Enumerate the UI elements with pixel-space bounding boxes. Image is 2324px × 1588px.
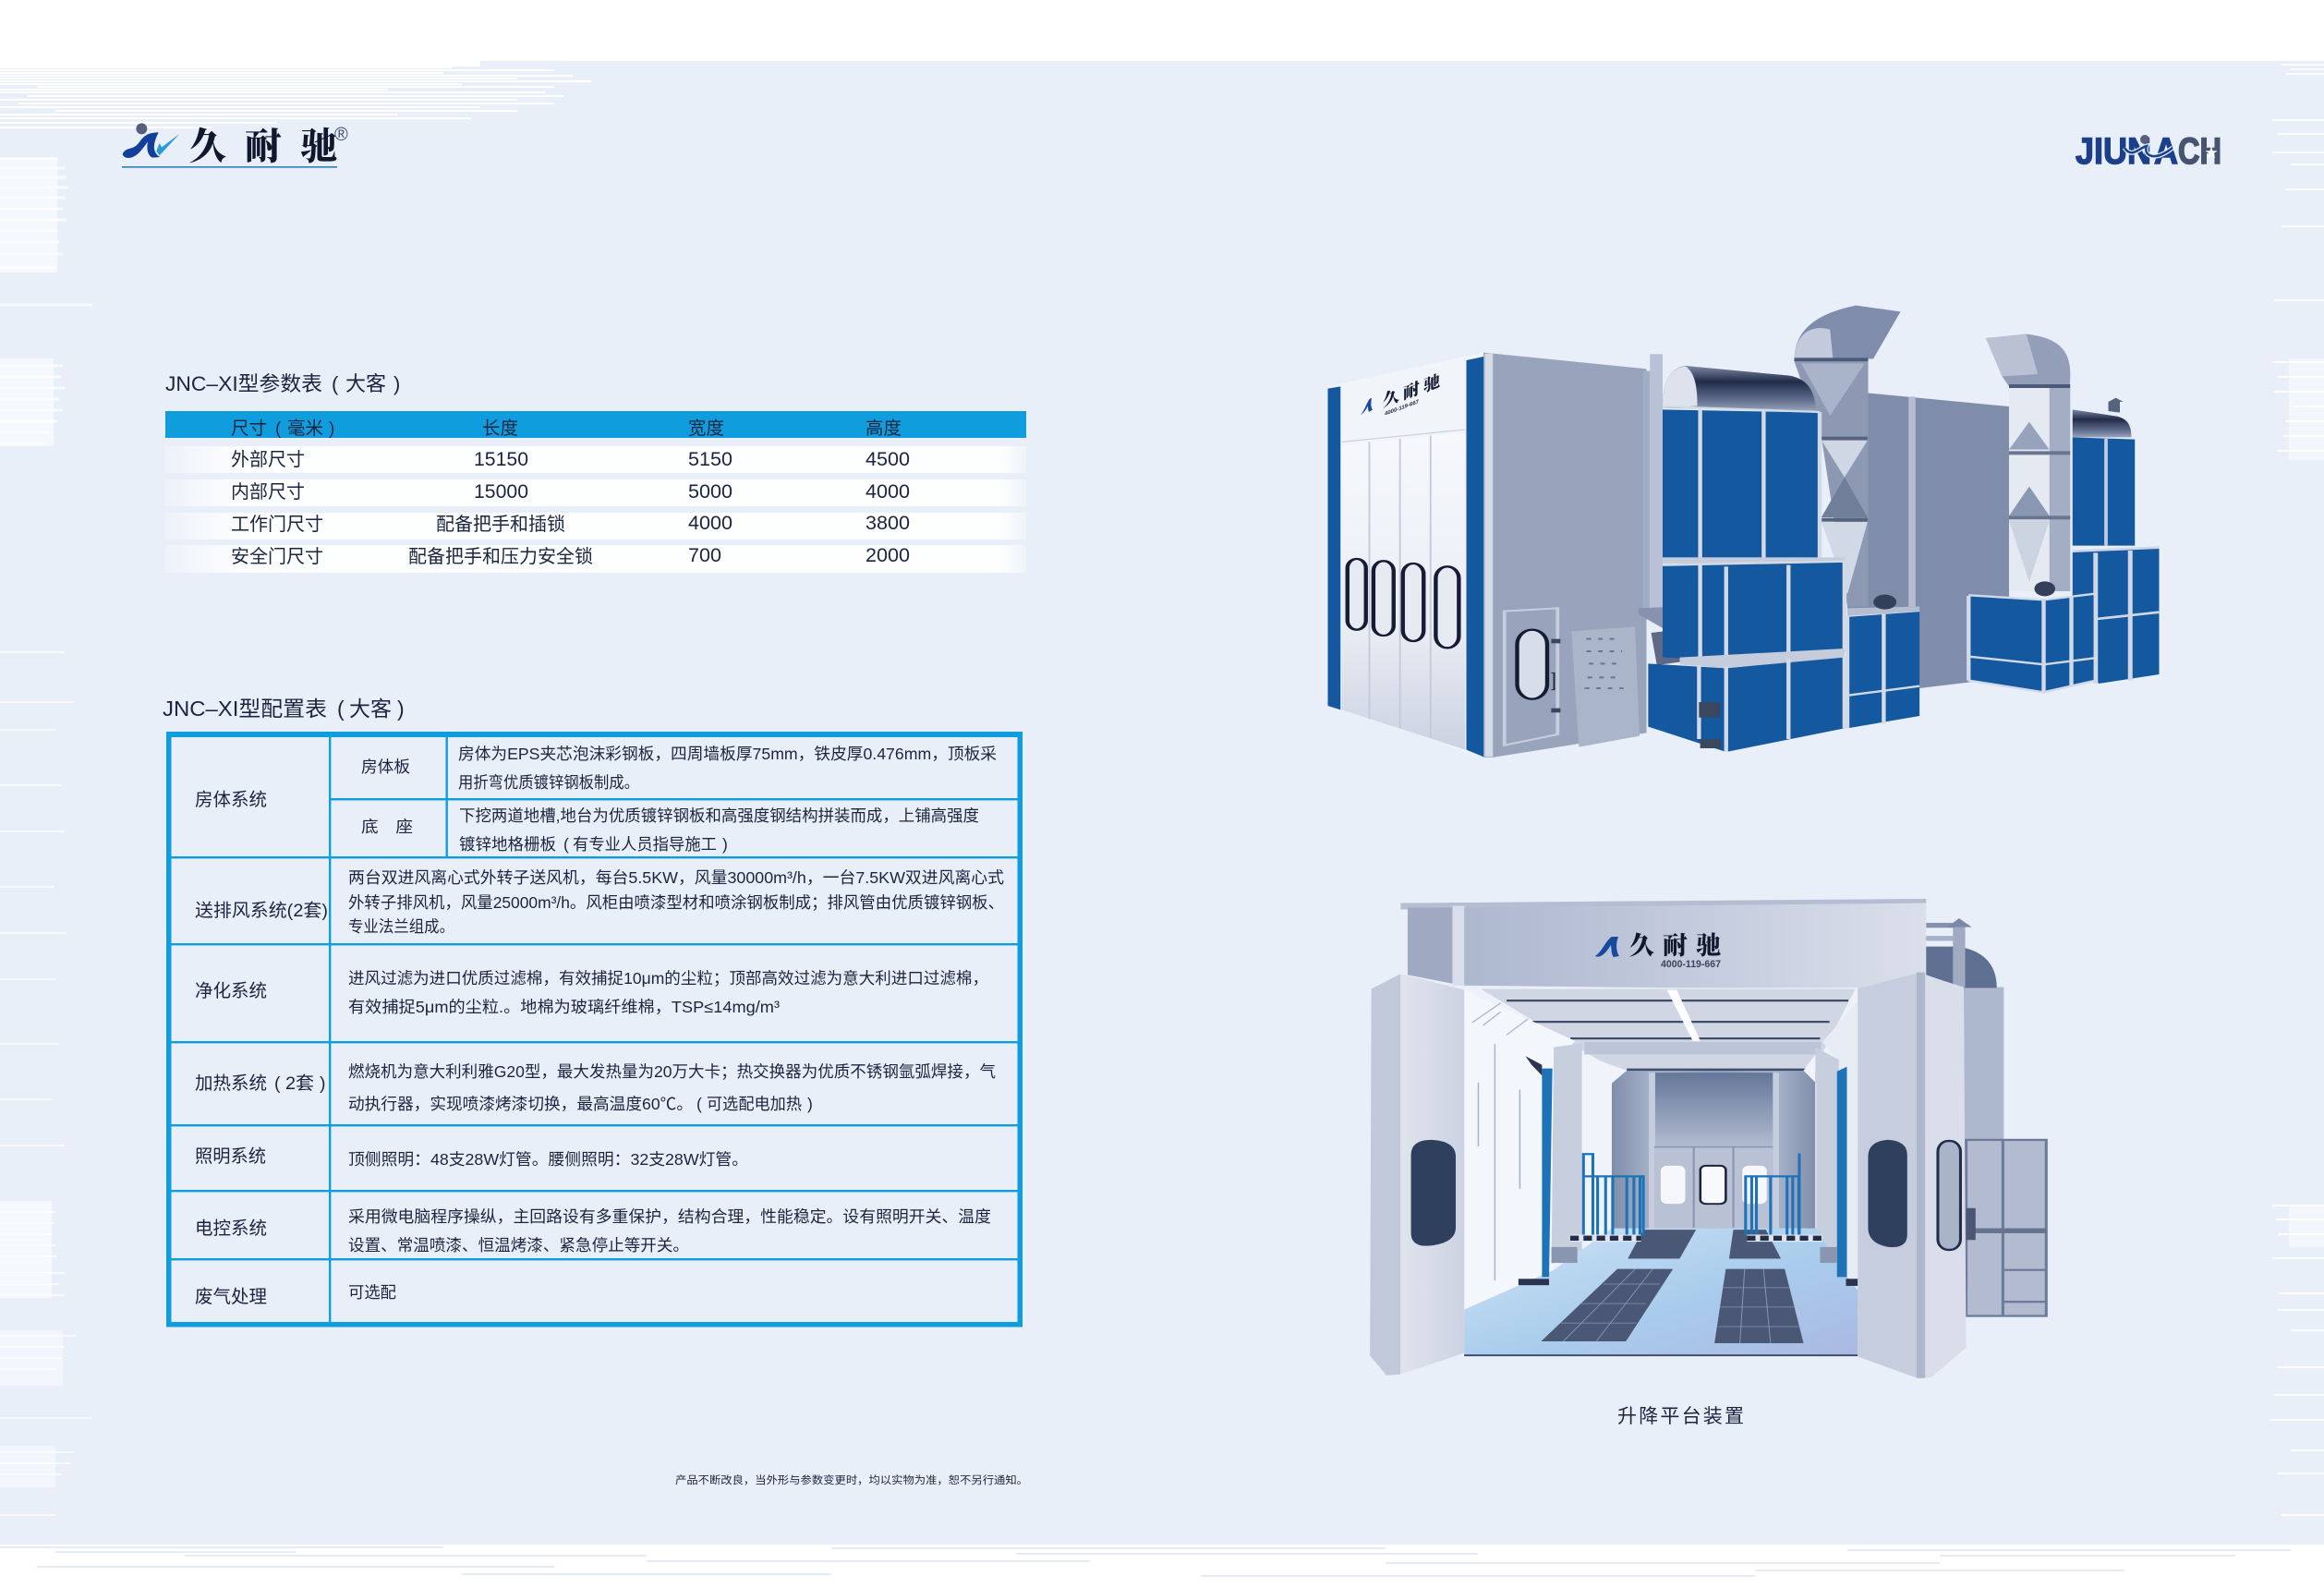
rear low cabinet xyxy=(2073,548,2160,684)
interior walls and ceiling xyxy=(1464,988,1858,1355)
icon: star: ★ xyxy=(2205,145,2218,160)
row: safety door: 配备把手和压力安全锁 xyxy=(408,546,593,567)
row: booth body: 底 座 xyxy=(361,818,413,836)
row: exhaust treatment: 可选配 xyxy=(348,1283,396,1302)
table header bar: 尺寸 xyxy=(231,418,267,439)
middle air cabinet xyxy=(1663,562,1845,661)
row: work door: 4000 xyxy=(688,513,732,534)
registered mark: ® xyxy=(334,125,348,145)
row: work door: 配备把手和插锁 xyxy=(436,514,565,535)
table header bar: 高度 xyxy=(865,418,902,439)
duct one xyxy=(1794,306,1901,607)
safety door xyxy=(1505,608,1560,746)
rear tall cabinet xyxy=(2073,398,2135,546)
row: purification: 有效捕捉5μm的尘粒.。地棉为玻璃纤维棉，TSP≤14mg/m³ xyxy=(348,998,780,1016)
row: heating: ) xyxy=(807,1095,813,1113)
heading: configuration table: JNC–XI型配置表 xyxy=(163,697,327,721)
row: booth body: 用折弯优质镀锌钢板制成。 xyxy=(458,773,639,792)
floor gratings xyxy=(1541,1230,1804,1343)
row: exterior: 15150 xyxy=(474,449,528,470)
row: booth body: 下挖两道地槽,地台为优质镀锌钢板和高强度钢结构拼装而成，上铺高强度 xyxy=(459,806,979,825)
row: booth body: 镀锌地格栅板 xyxy=(459,835,556,854)
row: exhaust treatment: 废气处理 xyxy=(195,1287,267,1307)
illustration: spray booth interior view xyxy=(1370,899,2046,1378)
row: lighting: 顶侧照明：48支28W灯管。腰侧照明：32支28W灯管。 xyxy=(348,1150,748,1169)
control panel xyxy=(1571,626,1640,747)
right door leaves xyxy=(1858,973,1967,1378)
caption: 升降平台装置 xyxy=(1617,1406,1744,1427)
row: booth body: 房体系统 xyxy=(195,790,267,810)
logo: JIUNACH wordmark: A xyxy=(2154,131,2178,172)
icon: swoosh mark xyxy=(123,123,179,158)
icon: swoosh over wordmark xyxy=(2124,135,2173,156)
front low cabinet xyxy=(1968,594,2096,692)
heading: configuration table: ( xyxy=(337,697,345,721)
row: lighting xyxy=(195,1146,748,1169)
row: air supply and exhaust: 两台双进风离心式外转子送风机，每台5.5KW，风量30000m³/h，一台7.5KW双进风离心式 xyxy=(348,868,1004,887)
back wall xyxy=(1612,1072,1816,1229)
table: dimensions xyxy=(165,411,1026,573)
row: safety door xyxy=(165,545,1026,573)
heading: parameter table: ) xyxy=(393,372,400,395)
row: exterior: 外部尺寸 xyxy=(231,449,305,470)
lower air cabinet xyxy=(1648,649,1845,752)
row: interior: 5000 xyxy=(688,481,732,503)
row: safety door: 安全门尺寸 xyxy=(231,546,323,567)
row: air supply and exhaust: 送排风系统(2套) xyxy=(195,901,328,921)
rear cabinet and stack xyxy=(1926,918,2046,1315)
logo: JIUNACH wordmark xyxy=(2076,131,2221,172)
row: safety door: 700 xyxy=(688,545,721,566)
left door leaf xyxy=(1370,974,1464,1376)
row: electric control: 采用微电脑程序操纵，主回路设有多重保护，结构合理，性能稳定。设有照明开关、温度 xyxy=(348,1207,991,1226)
top header xyxy=(1400,899,1926,990)
lifting platform right xyxy=(1746,1067,1858,1286)
row: air supply and exhaust: 外转子排风机，风量25000m³/h。风柜由喷漆型材和喷涂钢板制成；排风管由优质镀锌钢板、 xyxy=(348,893,1004,912)
row: heating: 动执行器，实现喷漆烤漆切换，最高温度60℃。 xyxy=(348,1095,693,1113)
footnote: 产品不断改良，当外形与参数变更时，均以实物为准，恕不另行通知。 xyxy=(675,1473,1028,1486)
row: heating: 加热系统 xyxy=(195,1073,267,1094)
row: booth body: ) xyxy=(722,835,728,854)
row: heating xyxy=(195,1062,996,1113)
row: air supply and exhaust xyxy=(195,868,1004,936)
row: interior: 内部尺寸 xyxy=(231,481,305,503)
heading: configuration table: ) xyxy=(397,697,405,721)
table header bar: ( xyxy=(275,419,282,439)
illustration: spray booth exterior xyxy=(1328,306,2160,758)
row: heating: ) xyxy=(320,1073,325,1094)
small cabinet xyxy=(1847,607,1919,728)
row: interior xyxy=(165,479,1026,506)
row: interior: 15000 xyxy=(474,481,528,503)
heading: parameter table: JNC–XI型参数表 xyxy=(165,372,322,395)
row: exterior: 4500 xyxy=(865,449,910,470)
heading: configuration table: 大客 xyxy=(349,697,392,721)
booth header logo: 久耐驰 xyxy=(1629,926,1721,962)
vent pipe xyxy=(1639,354,1681,665)
row: exhaust treatment xyxy=(195,1283,396,1307)
booth header logo xyxy=(1595,926,1721,970)
booth front logo xyxy=(1361,368,1440,426)
windows xyxy=(1348,559,1459,648)
logo: brand mark and name xyxy=(122,117,348,170)
row: work door: 3800 xyxy=(865,513,910,534)
rear wall xyxy=(1847,391,2009,688)
logo: JIUNACH wordmark: JIUN xyxy=(2076,131,2151,172)
logo: JIUNACH wordmark: CH xyxy=(2178,131,2221,172)
table grid xyxy=(166,732,1023,1327)
duct two xyxy=(1986,334,2070,591)
heading: parameter table: ( xyxy=(332,372,339,395)
table header bar: 长度 xyxy=(482,418,518,439)
row: booth body: 房体为EPS夹芯泡沫彩钢板，四周墙板厚75mm，铁皮厚0.476mm，顶板采 xyxy=(458,745,997,763)
row: booth body xyxy=(195,745,997,854)
row: heating: 2套 xyxy=(285,1073,314,1094)
row: heating: ( xyxy=(274,1073,281,1094)
table header bar: 宽度 xyxy=(688,418,724,439)
row: purification: 净化系统 xyxy=(195,981,267,1001)
row: purification: 进风过滤为进口优质过滤棉，有效捕捉10μm的尘粒；顶部高效过滤为意大利进口过滤棉， xyxy=(348,969,988,988)
heading: configuration table xyxy=(163,697,405,721)
row: exterior: 5150 xyxy=(688,449,732,470)
fan xyxy=(2034,581,2055,596)
booth front logo: 4000-119-667 xyxy=(1385,398,1420,418)
table: configuration xyxy=(166,732,1023,1327)
row: booth body: ( xyxy=(563,835,569,854)
row: purification xyxy=(195,969,988,1016)
booth header logo: 4000-119-667 xyxy=(1661,959,1721,970)
heading: parameter table: 大客 xyxy=(345,372,386,395)
row: heating: 燃烧机为意大利利雅G20型，最大发热量为20万大卡；热交换器为优质不锈钢氩弧焊接，气 xyxy=(348,1062,996,1081)
row: heating: 可选配电加热 xyxy=(707,1095,802,1113)
row: electric control: 电控系统 xyxy=(195,1218,267,1239)
table header bar: ) xyxy=(329,419,334,439)
row: exterior xyxy=(165,446,1026,473)
table header bar: 毫米 xyxy=(287,418,323,439)
right wall xyxy=(1804,1001,1858,1291)
row: electric control: 设置、常温喷漆、恒温烤漆、紧急停止等开关。 xyxy=(348,1236,689,1255)
row: lighting: 照明系统 xyxy=(195,1146,266,1167)
side wall xyxy=(1483,353,1646,758)
booth front logo: 久耐驰 xyxy=(1383,368,1440,412)
upper air cabinet xyxy=(1663,366,1845,564)
row: safety door: 2000 xyxy=(865,545,910,566)
lifting platform left xyxy=(1519,1056,1643,1285)
left wall xyxy=(1464,990,1627,1310)
row: booth body: 有专业人员指导施工 xyxy=(573,835,717,854)
table header bar xyxy=(165,411,1026,439)
row: interior: 4000 xyxy=(865,481,910,503)
row: work door xyxy=(165,513,1026,539)
brand name: 久耐驰 xyxy=(189,117,337,170)
row: electric control xyxy=(195,1207,991,1255)
row: heating: ( xyxy=(696,1095,702,1113)
floor xyxy=(1464,1229,1858,1356)
row: work door: 工作门尺寸 xyxy=(231,514,323,535)
row: booth body: 房体板 xyxy=(361,758,410,776)
fan xyxy=(1873,595,1896,610)
heading: parameter table xyxy=(165,372,400,395)
row: air supply and exhaust: 专业法兰组成。 xyxy=(348,917,454,936)
front face xyxy=(1328,353,1483,758)
